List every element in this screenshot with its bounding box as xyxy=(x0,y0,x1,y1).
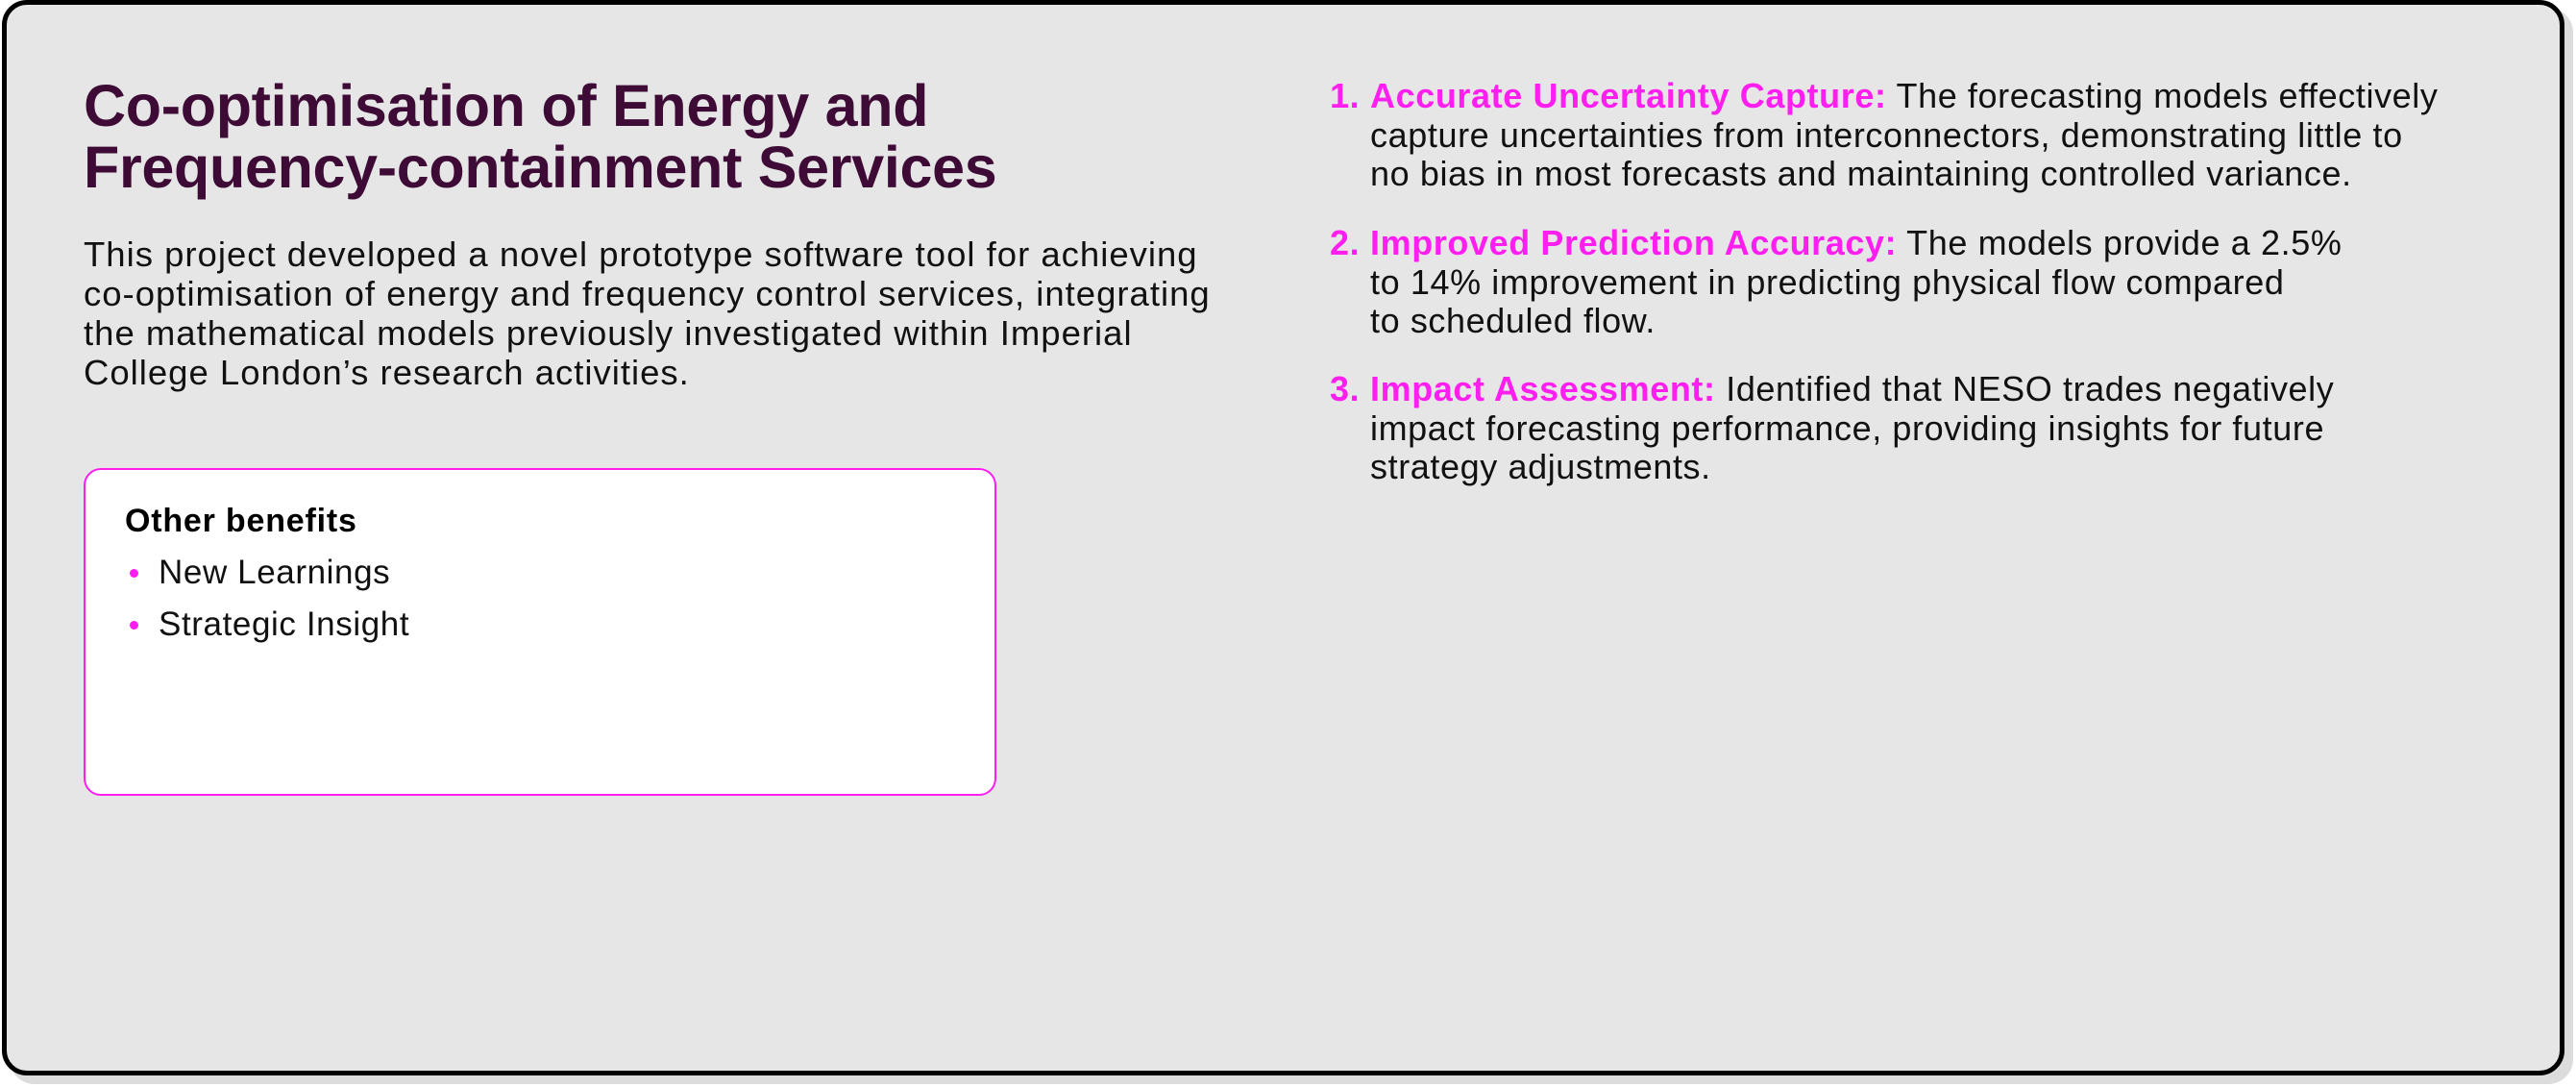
list item 2 xyxy=(1330,223,2342,340)
list item 2: to 14% improvement in predicting physical flow compared xyxy=(1370,261,2284,302)
text block: intro xyxy=(84,235,1211,392)
title: Frequency-containment Services xyxy=(84,135,996,200)
list item 2: Improved Prediction Accuracy: The models provide a 2.5% xyxy=(1370,223,2342,262)
text block: intro: College London’s research activities. xyxy=(84,353,690,392)
text block: intro: the mathematical models previously investigated within Imperial xyxy=(84,313,1133,353)
list item 3: 3. xyxy=(1330,369,1360,408)
list item 3: impact forecasting performance, providing insights for future xyxy=(1370,408,2324,448)
panel: other benefits xyxy=(84,468,996,796)
bullet: new learnings: New Learnings xyxy=(159,554,390,591)
list item 3 xyxy=(1330,369,2334,486)
title: Co-optimisation of Energy and xyxy=(84,73,928,138)
text block: intro: co-optimisation of energy and frequency control services, integrating xyxy=(84,274,1211,313)
list item 1: no bias in most forecasts and maintaining controlled variance. xyxy=(1370,154,2352,193)
list item 3: Impact Assessment: Identified that NESO trades negatively xyxy=(1370,369,2334,408)
list item 3: strategy adjustments. xyxy=(1370,447,1711,486)
list item 2: 2. xyxy=(1330,223,1360,262)
list item 2: to scheduled flow. xyxy=(1370,301,1656,340)
list item 1: capture uncertainties from interconnectors, demonstrating little to xyxy=(1370,115,2403,154)
list item 1: 1. xyxy=(1330,76,1360,115)
text block: intro: This project developed a novel prototype software tool for achieving xyxy=(84,235,1198,274)
list item 1: Accurate Uncertainty Capture: The forecasting models effectively xyxy=(1370,76,2439,115)
bullet: strategic insight: Strategic Insight xyxy=(159,605,409,643)
title xyxy=(84,73,996,200)
heading: other benefits: Other benefits xyxy=(125,503,357,539)
list item 1 xyxy=(1330,76,2439,193)
